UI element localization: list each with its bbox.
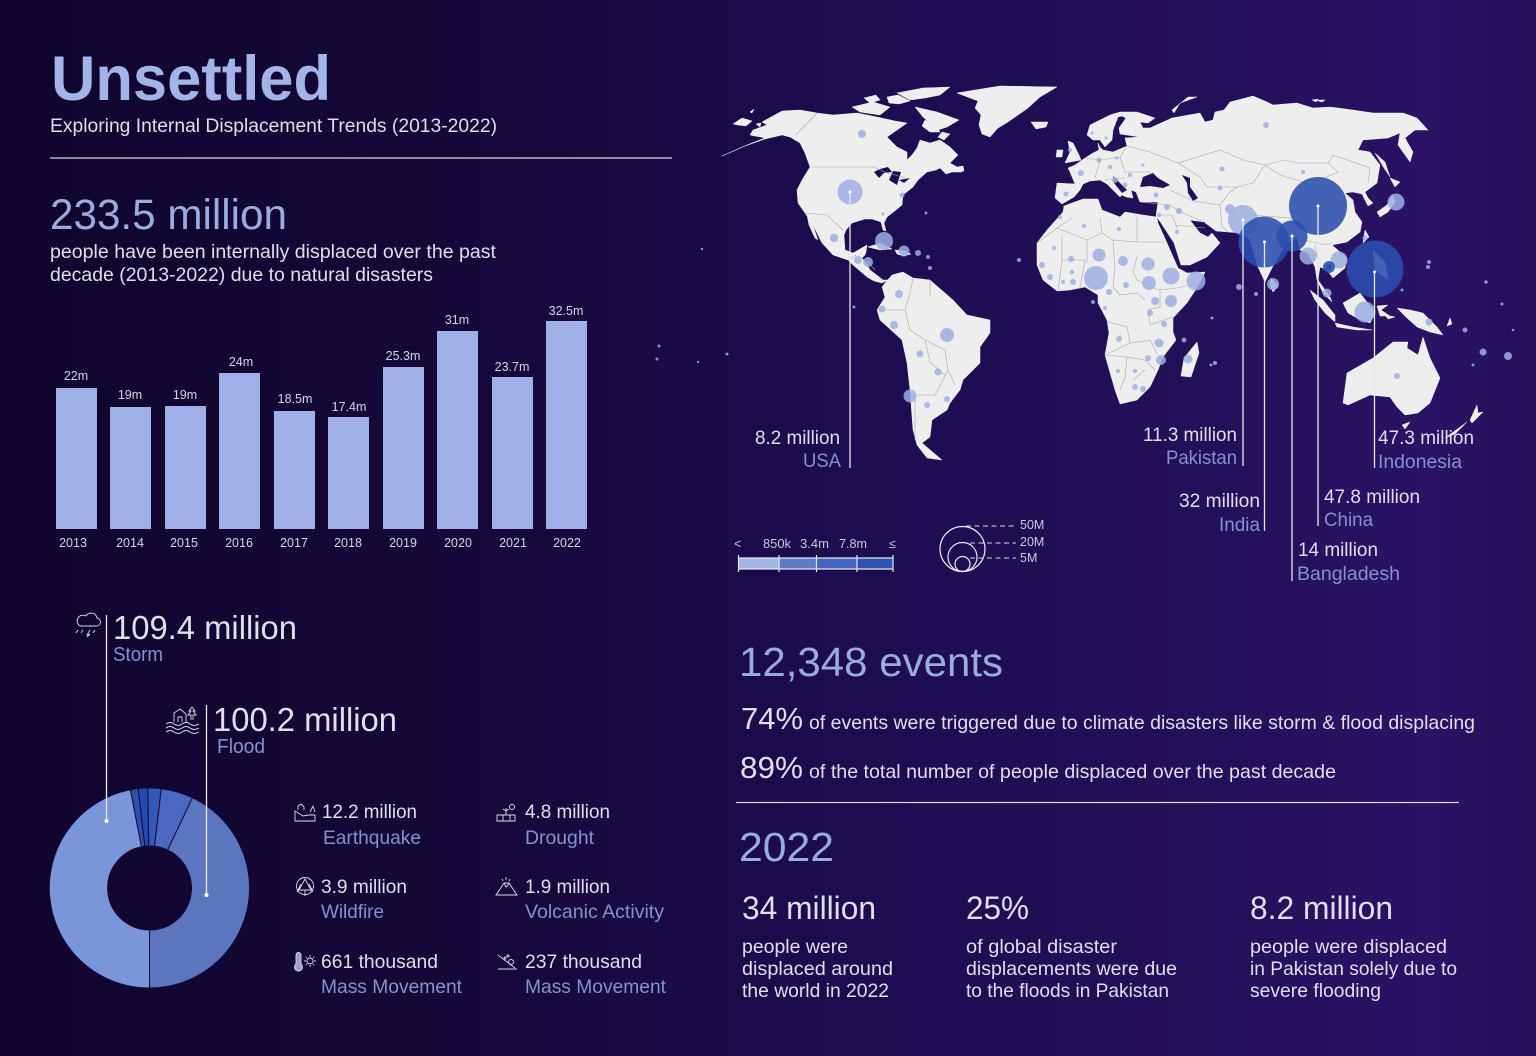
bar chart: displacement by year: 2022 [553, 536, 581, 550]
displacement bubbles: light [656, 122, 1514, 408]
bar chart: displacement by year: 2017 [280, 536, 308, 550]
inland seas [874, 167, 1198, 201]
legend: bubble size: 20M [1020, 535, 1044, 549]
icon: flooded house [166, 707, 199, 734]
icon: landslide [498, 955, 517, 969]
bar chart: displacement by year: 2018 [334, 536, 362, 550]
stat: 34 million: displaced around [742, 958, 893, 980]
label: Indonesia [1373, 270, 1474, 473]
stat block: events: 12,348 events [739, 639, 1003, 685]
bar chart: displacement by year: 2021 [499, 536, 527, 550]
displacement bubbles: dark [1238, 177, 1404, 298]
bar chart: displacement by year [56, 304, 587, 550]
stat block: events: 74% [741, 701, 803, 736]
bar chart: displacement by year: 2014 [116, 536, 144, 550]
legend: drought: 4.8 million [525, 801, 610, 823]
icon: volcano [496, 877, 517, 895]
headline stat: total displaced [50, 191, 497, 286]
icon: burning trees [296, 878, 314, 896]
bar chart: displacement by year: 2013 [59, 536, 87, 550]
bar chart: displacement by year: 18.5m [278, 392, 312, 406]
label: USA: 8.2 million [755, 427, 840, 449]
storm callout [76, 609, 297, 823]
stat: 8.2 million: people were displaced [1250, 936, 1447, 958]
label: Indonesia: Indonesia [1378, 451, 1462, 473]
legend: volcanic activity: 1.9 million [525, 876, 610, 898]
icon: thermometer and sun [294, 952, 316, 971]
stat: 25%: 25% [966, 890, 1029, 926]
bar chart: displacement by year: 2015 [170, 536, 198, 550]
flood callout: 100.2 million [213, 701, 397, 738]
stat: 34 million [742, 890, 893, 1002]
legend: mass movement: Mass Movement [525, 976, 667, 998]
legend: wildfire [296, 876, 407, 923]
legend: colour scale: ≤ [889, 537, 896, 551]
legend: wildfire: 3.9 million [321, 876, 407, 898]
label: India: 32 million [1179, 490, 1260, 512]
stat: 8.2 million: severe flooding [1250, 980, 1381, 1002]
label: Pakistan: Pakistan [1166, 447, 1237, 469]
stat: 8.2 million [1250, 890, 1457, 1002]
label: India [1179, 240, 1266, 536]
legend: earthquake: 12.2 million [322, 801, 417, 823]
legend: earthquake: Earthquake [323, 827, 421, 849]
bar chart: displacement by year: 2019 [389, 536, 417, 550]
legend: colour scale: 3.4m [800, 537, 829, 551]
legend: extreme temperature: 661 thousand [321, 951, 438, 973]
legend: colour scale [734, 537, 896, 572]
storm callout: 109.4 million [113, 609, 297, 646]
label: USA [755, 190, 852, 472]
label: Pakistan: 11.3 million [1143, 424, 1237, 446]
legend: extreme temperature [294, 951, 463, 998]
land masses [722, 86, 1483, 460]
label: China [1316, 204, 1420, 531]
bar chart: displacement by year: 24m [229, 355, 253, 369]
stat: 8.2 million: in Pakistan solely due to [1250, 958, 1457, 980]
stat: 8.2 million: 8.2 million [1250, 890, 1393, 926]
icon: storm cloud [76, 613, 101, 637]
bar chart: displacement by year: 2020 [444, 536, 472, 550]
label: Bangladesh: Bangladesh [1297, 563, 1400, 585]
stat: 34 million: 34 million [742, 890, 876, 926]
headline stat: total displaced: 233.5 million [50, 191, 287, 239]
stat: 34 million: people were [742, 936, 848, 958]
country borders [796, 113, 1370, 440]
flood callout [166, 701, 397, 897]
bar chart: displacement by year: 25.3m [386, 349, 420, 363]
bar chart: displacement by year: 22m [64, 369, 88, 383]
headline stat: total displaced: people have been internally displaced over the past [50, 242, 497, 263]
label: China: China [1324, 509, 1373, 531]
legend: earthquake [295, 801, 421, 849]
legend: bubble size [940, 518, 1044, 572]
legend: volcanic activity [496, 876, 664, 923]
heading: 2022: 2022 [739, 824, 834, 870]
label: Bangladesh: 14 million [1298, 539, 1378, 561]
bar chart: displacement by year: 32.5m [549, 304, 583, 318]
legend: colour scale: 850k [763, 537, 792, 551]
icon: drought [497, 804, 515, 821]
label: USA: USA [803, 450, 841, 472]
stat: 25% [966, 890, 1177, 1002]
stat block: events [739, 639, 1475, 785]
stat block: events: 89% [740, 750, 803, 785]
legend: drought: Drought [525, 827, 595, 849]
stat: 25%: displacements were due [966, 958, 1177, 980]
bar chart: displacement by year: 19m [118, 388, 142, 402]
legend: extreme temperature: Mass Movement [321, 976, 463, 998]
legend: mass movement: 237 thousand [525, 951, 642, 973]
stat: 25%: to the floods in Pakistan [966, 980, 1169, 1002]
stat block: events: of events were triggered due to climate disasters like storm & flood displacing [809, 712, 1475, 734]
bar chart: displacement by year: 23.7m [495, 360, 529, 374]
label: China: 47.8 million [1324, 486, 1420, 508]
legend: colour scale: < [734, 537, 741, 551]
legend: bubble size: 50M [1020, 518, 1044, 532]
label: India: India [1219, 514, 1260, 536]
legend: volcanic activity: Volcanic Activity [525, 901, 664, 923]
storm callout: Storm [113, 644, 163, 666]
world map [656, 86, 1514, 585]
label: Indonesia: 47.3 million [1378, 427, 1474, 449]
bar chart: displacement by year: 31m [445, 313, 469, 327]
bar chart: displacement by year: 2016 [225, 536, 253, 550]
stat block: events: of the total number of people displaced over the past decade [809, 761, 1336, 783]
title: Unsettled [51, 44, 331, 114]
donut chart: displacement by disaster type [49, 788, 250, 988]
label: Pakistan [1143, 218, 1244, 469]
legend: drought [497, 801, 610, 849]
legend: colour scale: 7.8m [839, 537, 867, 551]
flood callout: Flood [217, 736, 265, 758]
subtitle: Exploring Internal Displacement Trends (2013-2022) [50, 116, 497, 137]
legend: mass movement [498, 951, 667, 998]
legend: wildfire: Wildfire [321, 901, 384, 923]
headline stat: total displaced: decade (2013-2022) due to natural disasters [50, 265, 433, 286]
legend: bubble size: 5M [1020, 551, 1037, 565]
bar chart: displacement by year: 19m [173, 388, 197, 402]
icon: earthquake [295, 804, 315, 821]
label: Bangladesh [1290, 234, 1400, 585]
stat: 34 million: the world in 2022 [742, 980, 889, 1002]
bar chart: displacement by year: 17.4m [332, 400, 366, 414]
stat: 25%: of global disaster [966, 936, 1118, 958]
